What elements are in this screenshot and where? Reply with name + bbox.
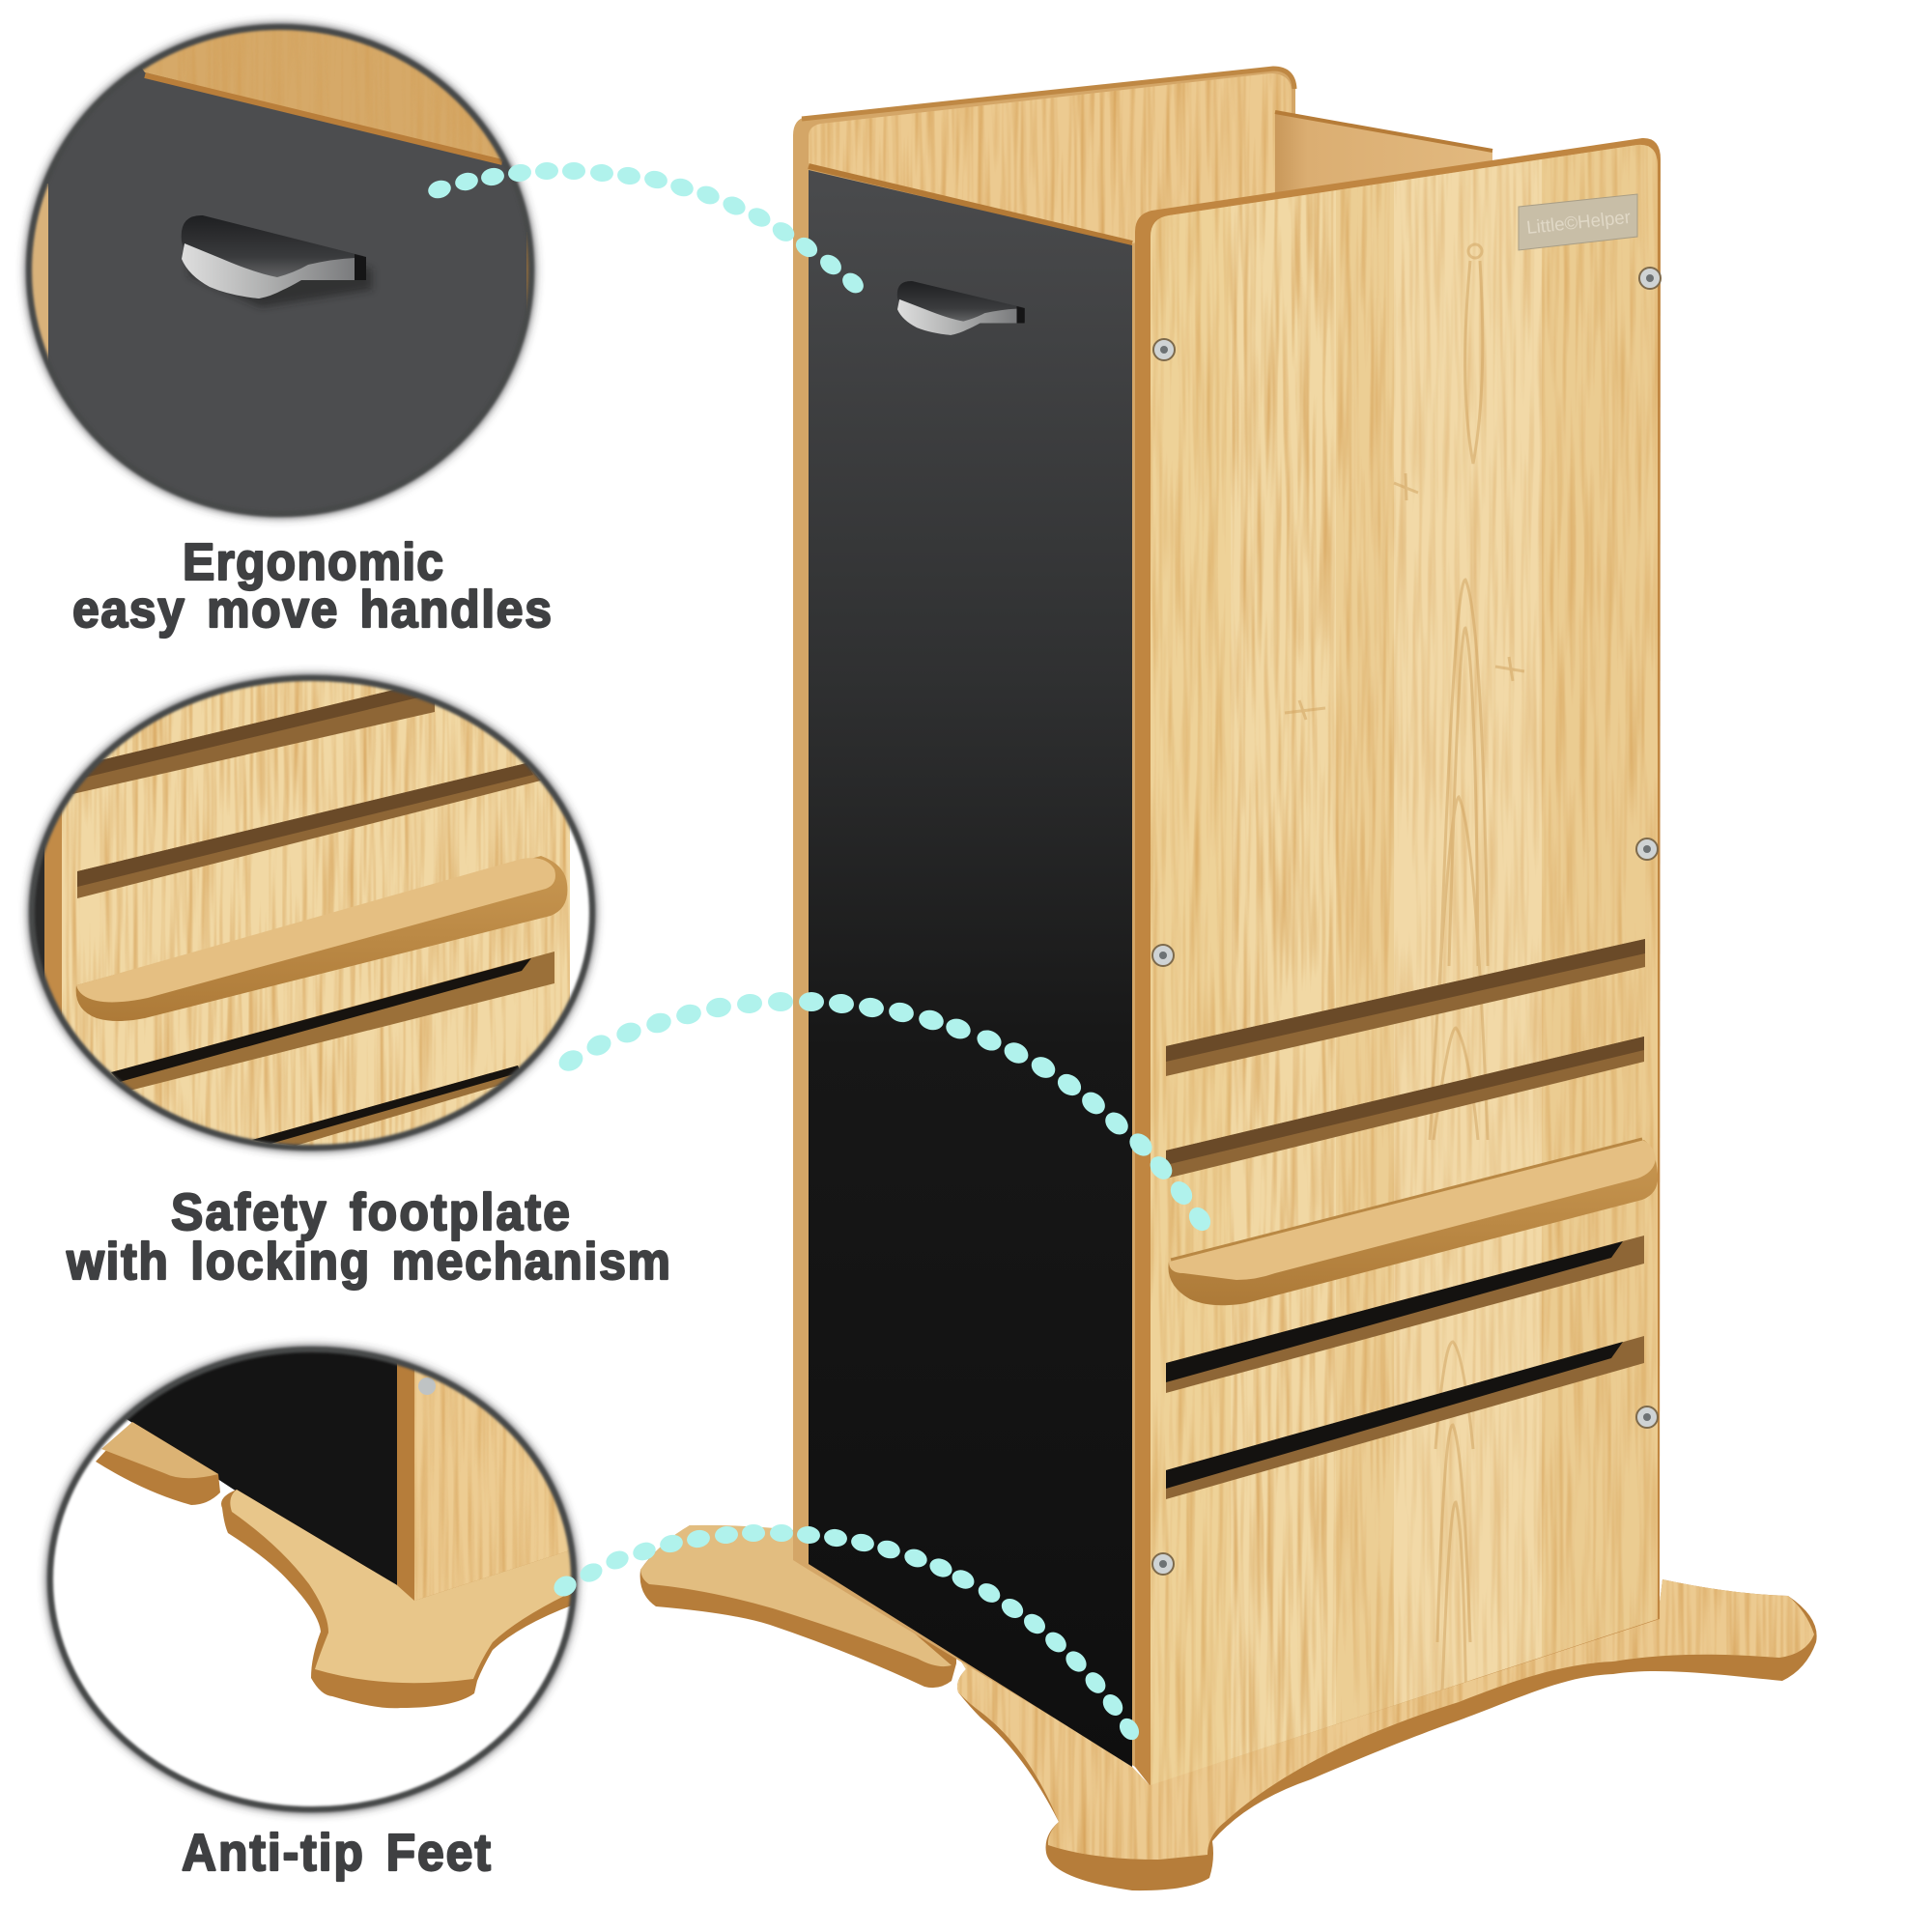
inner wall of tower bbox=[1275, 112, 1492, 208]
label: safety footplate: with locking mechanism bbox=[66, 1233, 670, 1291]
label: safety footplate bbox=[66, 1183, 670, 1291]
base: front foot bbox=[947, 1575, 1826, 1890]
ventilation slots on front panel bbox=[1166, 939, 1645, 1499]
dotted connector: footplate bbox=[555, 992, 1215, 1235]
screws bbox=[1152, 268, 1661, 1575]
handle on blackboard bbox=[897, 281, 1025, 335]
wood edge left bbox=[30, 184, 48, 361]
brand plate: Little©Helper bbox=[1525, 208, 1633, 239]
handle close-up bbox=[182, 215, 372, 307]
blackboard panel bbox=[809, 170, 1132, 1767]
product: wooden learning tower bbox=[640, 67, 1826, 1890]
black panel close-up bbox=[121, 1343, 397, 1585]
brand plate bbox=[1519, 194, 1637, 250]
left foot close-up bbox=[96, 1422, 220, 1505]
wood above blackboard bbox=[142, 28, 503, 165]
wood panel close-up bbox=[397, 1363, 570, 1601]
back panel bbox=[793, 67, 1304, 1767]
slot A bbox=[72, 680, 435, 794]
label: ergonomic handles: Ergonomic bbox=[183, 533, 443, 591]
base: left foot bbox=[640, 1525, 956, 1688]
callout circle: anti-tip feet detail bbox=[47, 1343, 584, 1812]
dotted connector: feet bbox=[551, 1524, 1143, 1744]
callout circle: handle detail bbox=[19, 10, 541, 522]
slot D bbox=[252, 1065, 524, 1146]
dotted connector: handle bbox=[426, 161, 867, 298]
label: ergonomic handles bbox=[72, 533, 552, 639]
slot B bbox=[77, 763, 541, 898]
slot C bbox=[111, 952, 554, 1091]
safety footplate bbox=[1168, 1139, 1658, 1305]
label: safety footplate: Safety footplate bbox=[171, 1183, 570, 1241]
label: ergonomic handles: easy move handles bbox=[72, 581, 552, 639]
front foot close-up bbox=[221, 1490, 584, 1708]
footplate close-up bbox=[76, 856, 567, 1021]
callout circle: footplate detail bbox=[19, 671, 609, 1154]
front wooden side panel bbox=[1135, 135, 1666, 1797]
label: anti-tip feet: Anti-tip Feet bbox=[182, 1824, 491, 1882]
